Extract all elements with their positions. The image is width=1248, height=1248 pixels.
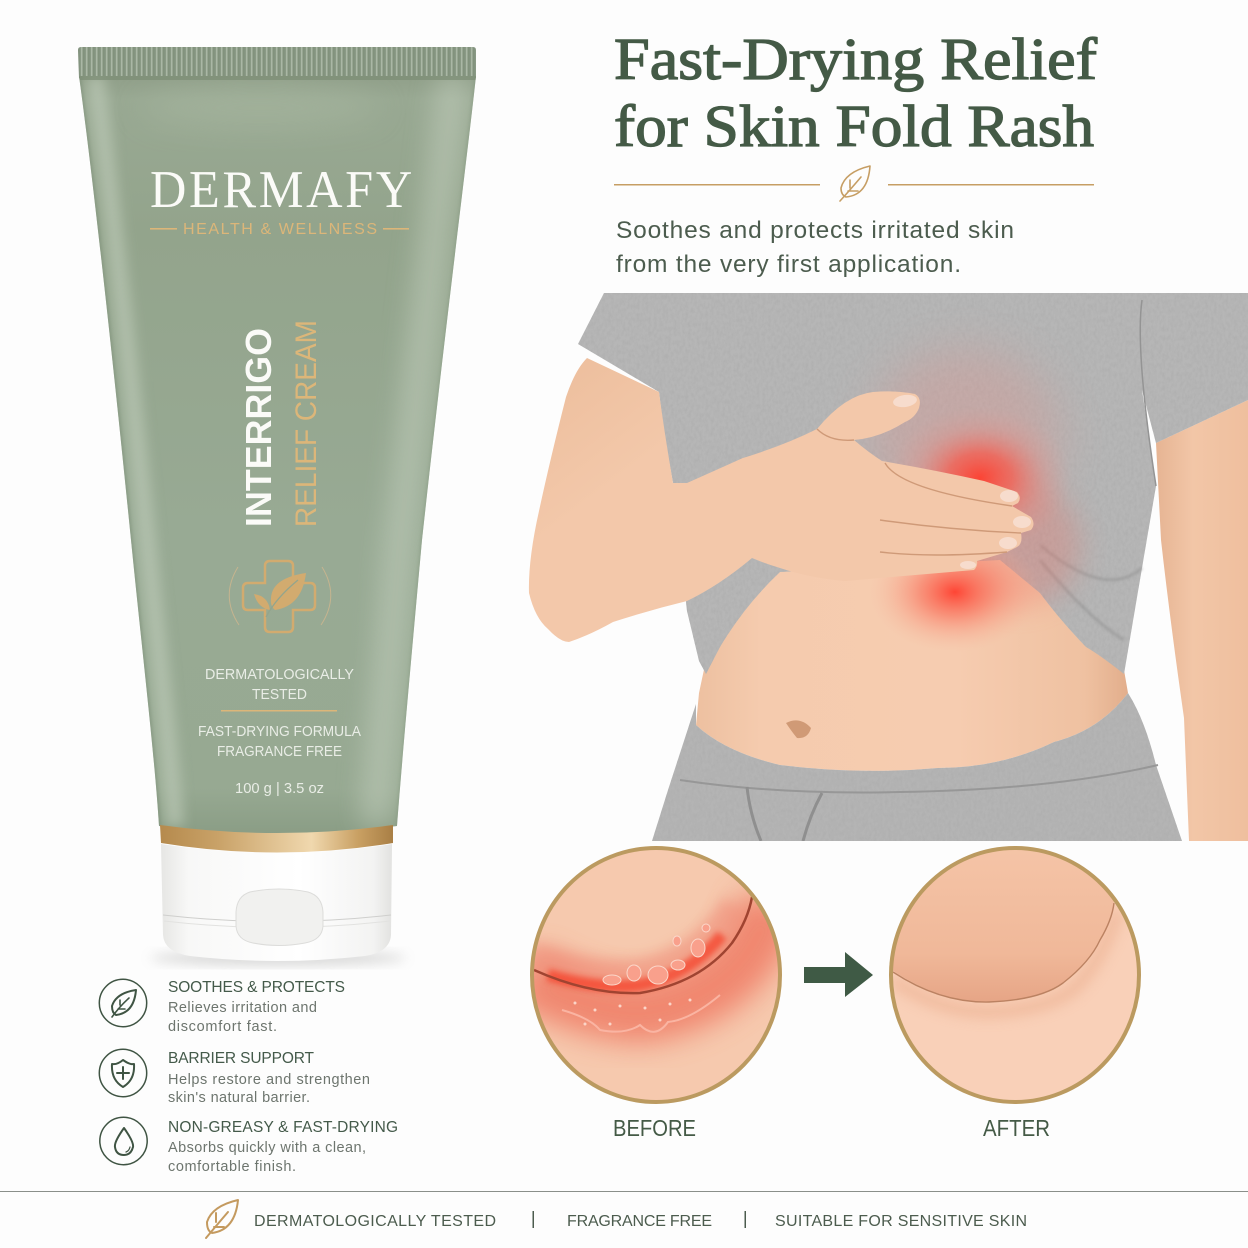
after label: AFTER [983,1115,1050,1141]
subheading: Soothes and protects irritated skin [616,217,1014,244]
product tube [78,47,478,965]
feature: soothes and protects: discomfort fast. [168,1019,277,1035]
icon: bottom leaf [206,1200,238,1238]
feature: soothes and protects: SOOTHES & PROTECTS [168,979,345,996]
gold collar [160,825,393,852]
after: upper fold [885,840,1114,1002]
feature list [99,979,398,1175]
headline: for Skin Fold Rash [614,93,1094,159]
cap thumb notch [236,889,323,946]
after: lower skin [893,902,1137,1100]
icon: shield [99,1049,147,1097]
hand [734,391,1034,576]
before circle [525,845,780,1105]
tube body [78,76,478,842]
claim: fragrance free: FRAGRANCE FREE [217,744,342,760]
brand name: DERMAFY [150,161,412,219]
white cap [161,844,392,961]
before: skin [530,845,780,1105]
headline divider with leaf [614,166,1094,201]
t-shirt [578,293,1248,674]
vertical product type: RELIEF CREAM [290,320,323,527]
feature: barrier support: skin's natural barrier. [168,1090,310,1106]
belly [696,540,1128,771]
before: blisters [562,924,720,1032]
after circle [885,840,1140,1105]
before: speckles [574,998,692,1026]
subheading [616,217,1014,278]
tube crimp seal [78,47,476,78]
feature: barrier support: BARRIER SUPPORT [168,1050,315,1067]
feature: non-greasy and fast-drying [100,1117,398,1175]
bottom trust bar: DERMATOLOGICALLY TESTED [254,1213,496,1230]
drawstrings [747,787,822,841]
claim: dermatologically tested: DERMATOLOGICALLY [205,667,354,683]
brand tagline: HEALTH & WELLNESS [183,221,377,238]
finger separations [817,429,1021,555]
photo: torso with highlighted rash [529,293,1248,841]
bottom trust bar [206,1200,1027,1238]
icon: gold leaf [840,166,870,201]
feature: soothes and protects: Relieves irritation and [168,1000,317,1016]
feature: non-greasy and fast-drying: comfortable finish. [168,1159,296,1175]
headline: Fast-Drying Relief [614,26,1097,92]
before: skin fold [548,935,722,986]
icon: leaf [99,979,147,1027]
right arm [1156,400,1248,841]
before label: BEFORE [613,1115,696,1141]
red inflammation glow [870,350,1080,652]
arrow [804,952,873,997]
feature: barrier support: Helps restore and strengthen [168,1072,370,1088]
bottom trust bar: FRAGRANCE FREE [567,1213,712,1230]
feature: non-greasy and fast-drying: NON-GREASY & FAST-DRYING [168,1119,398,1136]
subheading: from the very first application. [616,251,961,278]
headline [614,26,1097,159]
vertical product name: INTERRIGO [238,328,279,527]
left arm [529,358,752,642]
emblem: cross and leaf [229,561,331,632]
before: redness halo [525,900,772,1012]
feature: barrier support [99,1049,370,1106]
sweatpants [652,693,1182,841]
icon: water drop [100,1117,147,1165]
claim: fast-drying formula: FAST-DRYING FORMULA [198,724,361,740]
claim line two: TESTED [252,687,307,703]
bottom trust bar: SUITABLE FOR SENSITIVE SKIN [775,1213,1027,1230]
feature: non-greasy and fast-drying: Absorbs quickly with a clean, [168,1140,366,1156]
net weight: 100 g | 3.5 oz [235,781,324,797]
feature: soothes and protects [99,979,345,1035]
fingernails [892,393,1031,569]
navel [786,720,811,738]
